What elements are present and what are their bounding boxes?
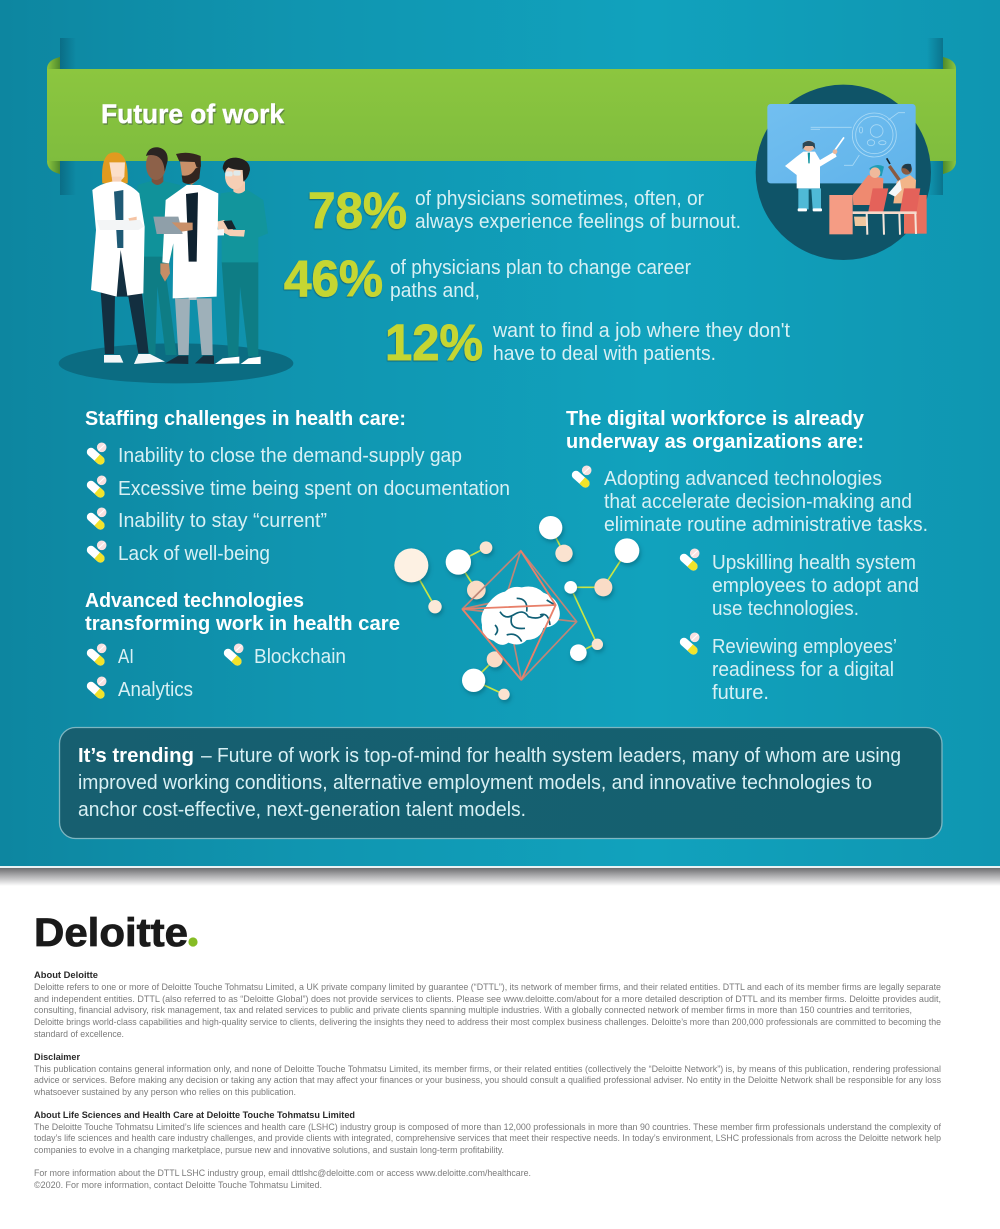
footer: about Deloitte: and independent entities. DTTL (also referred to as “Deloitte Global”) does not provide services to clients. Please see www.deloitte.com/about for a more detailed description of DTTL and its member firms. Deloitte provides audit, bbox=[34, 993, 941, 1004]
callout: it's trending bbox=[60, 728, 942, 838]
Deloitte logo: Deloitte bbox=[34, 911, 188, 955]
stat: 78% burnout bbox=[308, 182, 741, 239]
list item: reviewing readiness: readiness for a digital bbox=[712, 658, 894, 681]
stat: 12% away from patients bbox=[385, 314, 790, 371]
illustration: brain and molecules bbox=[394, 516, 639, 700]
list item: adopting technologies bbox=[570, 466, 928, 536]
list item: reviewing readiness: future. bbox=[712, 681, 769, 704]
person: right, teal with tablet bbox=[208, 158, 268, 364]
footer: about Deloitte: Deloitte brings world-class capabilities and high-quality service to clients, delivering the insights they need to address their most complex business challenges. Deloitte’s more than 200,000 professionals are committed to becoming the bbox=[34, 1016, 941, 1027]
teacher bbox=[785, 137, 844, 211]
footer: disclaimer: This publication contains general information only, and none of Deloitte Touche Tohmatsu Limited, its member firms, or their related entities (collectively the “Deloitte Network”) is, by means of this publication, rendering professional bbox=[34, 1063, 941, 1074]
list item: adopting technologies: eliminate routine administrative tasks. bbox=[604, 513, 928, 536]
list item: upskilling bbox=[678, 548, 919, 620]
footer: about life sciences: About Life Sciences and Health Care at Deloitte Touche Tohmatsu Limited bbox=[34, 1109, 355, 1120]
stat: 12% away from patients: want to find a job where they don't bbox=[492, 319, 790, 342]
wireframe back bbox=[462, 551, 577, 680]
footer: about Deloitte: standard of excellence. bbox=[34, 1028, 124, 1039]
footer: about life sciences: The Deloitte Touche Tohmatsu Limited’s life sciences and health care (LSHC) industry group is composed of more than 12,000 professionals in more than 90 countries. These member firm professionals understand the complexity of bbox=[34, 1121, 941, 1132]
callout: it's trending: anchor cost-effective, next-generation talent models. bbox=[78, 798, 526, 821]
list item: upskilling: use technologies. bbox=[712, 597, 859, 620]
person: bearded man in white coat bbox=[153, 153, 218, 364]
list: advanced technologies: Blockchain bbox=[254, 645, 346, 668]
whiteboard bbox=[767, 104, 916, 183]
footer: contact and copyright: For more information about the DTTL LSHC industry group, email dttlshc@deloitte.com or access www.deloitte.com/healthcare. bbox=[34, 1167, 531, 1178]
heading: advanced technologies bbox=[85, 589, 400, 635]
illustration: four health workers bbox=[59, 147, 293, 383]
heading: advanced technologies: Advanced technologies bbox=[85, 589, 304, 612]
stat: 46% change career: paths and, bbox=[390, 279, 480, 302]
footer: disclaimer: whatsoever sustained by any person who relies on this publication. bbox=[33, 1086, 296, 1097]
stat: 46% change career: of physicians plan to change career bbox=[390, 256, 691, 279]
list: staffing challenges: Inability to stay “current” bbox=[118, 509, 327, 532]
footer: about Deloitte: consulting, financial advisory, risk management, tax and related services to public and private clients spanning multiple industries. With a globally connected network of member firms in more than 150 countries and territories, bbox=[34, 1004, 912, 1015]
footer: disclaimer bbox=[33, 1051, 941, 1097]
list item: reviewing readiness bbox=[678, 632, 897, 704]
stat: 46% change career: 46% bbox=[284, 250, 383, 307]
green ribbon banner bbox=[47, 38, 956, 195]
illustration: classroom in circle bbox=[756, 85, 931, 260]
footer top shadow band bbox=[0, 866, 1000, 886]
list: advanced technologies: AI bbox=[118, 645, 134, 668]
list: staffing challenges bbox=[85, 442, 510, 565]
stat: 78% burnout: 78% bbox=[308, 182, 407, 239]
ground ellipse bbox=[59, 343, 293, 383]
brain bbox=[481, 587, 560, 645]
title: Future of work bbox=[101, 99, 284, 129]
footer: disclaimer: Disclaimer bbox=[34, 1051, 80, 1062]
heading: advanced technologies: transforming work in health care bbox=[85, 612, 400, 635]
footer: contact and copyright: ©2020. For more information, contact Deloitte Touche Tohmatsu Limited. bbox=[34, 1179, 322, 1190]
molecule nodes bbox=[394, 516, 639, 700]
list item: upskilling: Upskilling health system bbox=[712, 551, 916, 574]
callout: it's trending: It’s trending bbox=[78, 744, 194, 767]
heading: digital workforce bbox=[566, 407, 865, 453]
footer: about Deloitte: About Deloitte bbox=[34, 969, 98, 980]
list: staffing challenges: Excessive time being spent on documentation bbox=[118, 477, 510, 500]
wireframe front bbox=[462, 551, 556, 680]
molecule links bbox=[411, 528, 627, 694]
list item: adopting technologies: that accelerate decision-making and bbox=[604, 490, 912, 513]
stat: 78% burnout: of physicians sometimes, often, or bbox=[415, 187, 704, 210]
list: staffing challenges: Inability to close the demand-supply gap bbox=[118, 444, 462, 467]
list item: upskilling: employees to adopt and bbox=[712, 574, 919, 597]
list item: reviewing readiness: Reviewing employees’ bbox=[712, 635, 897, 658]
callout: it's trending: improved working conditions, alternative employment models, and innovative technologies to bbox=[78, 771, 872, 794]
stat: 46% change career bbox=[284, 250, 691, 307]
stat: 12% away from patients: 12% bbox=[385, 314, 483, 371]
students and desks bbox=[829, 158, 927, 235]
person: man in teal, back bbox=[137, 147, 182, 355]
list item: adopting technologies: Adopting advanced technologies bbox=[604, 467, 882, 490]
footer: about Deloitte bbox=[34, 969, 941, 1039]
footer: about life sciences: today’s life sciences and health care industry challenges, and provide clients with integrated, comprehensive services that meet their respective needs. In today’s environment, LSHC professionals from across the Deloitte network help bbox=[34, 1132, 941, 1143]
stat: 78% burnout: always experience feelings of burnout. bbox=[415, 210, 741, 233]
footer: about life sciences: companies to evolve in a changing marketplace, pursue new and innovative solutions, and sustain long-term profitability. bbox=[34, 1144, 504, 1155]
footer: contact and copyright bbox=[34, 1167, 531, 1190]
teal background panel bbox=[0, 0, 1000, 866]
footer: about life sciences bbox=[34, 1109, 941, 1155]
list: advanced technologies bbox=[85, 644, 346, 701]
heading: staffing challenges: Staffing challenges in health care: bbox=[85, 407, 406, 430]
list: staffing challenges: Lack of well-being bbox=[118, 542, 270, 565]
heading: digital workforce: underway as organizations are: bbox=[566, 430, 864, 453]
list: advanced technologies: Analytics bbox=[118, 678, 193, 701]
footer: about Deloitte: Deloitte refers to one or more of Deloitte Touche Tohmatsu Limited, a UK private company limited by guarantee (“DTTL”), its network of member firms, and their related entities. DTTL and each of its member firms are legally separate bbox=[34, 981, 941, 992]
stat: 12% away from patients: have to deal with patients. bbox=[493, 342, 716, 365]
footer: disclaimer: advice or services. Before making any decision or taking any action that may affect your finances or your business, you should consult a qualified professional adviser. No entity in the Deloitte Network shall be responsible for any loss bbox=[34, 1074, 941, 1085]
cell diagram bbox=[811, 113, 905, 165]
callout: it's trending: – Future of work is top-of-mind for health system leaders, many of whom are using bbox=[201, 744, 901, 767]
heading: digital workforce: The digital workforce is already bbox=[566, 407, 865, 430]
person: woman in white coat bbox=[91, 152, 165, 364]
